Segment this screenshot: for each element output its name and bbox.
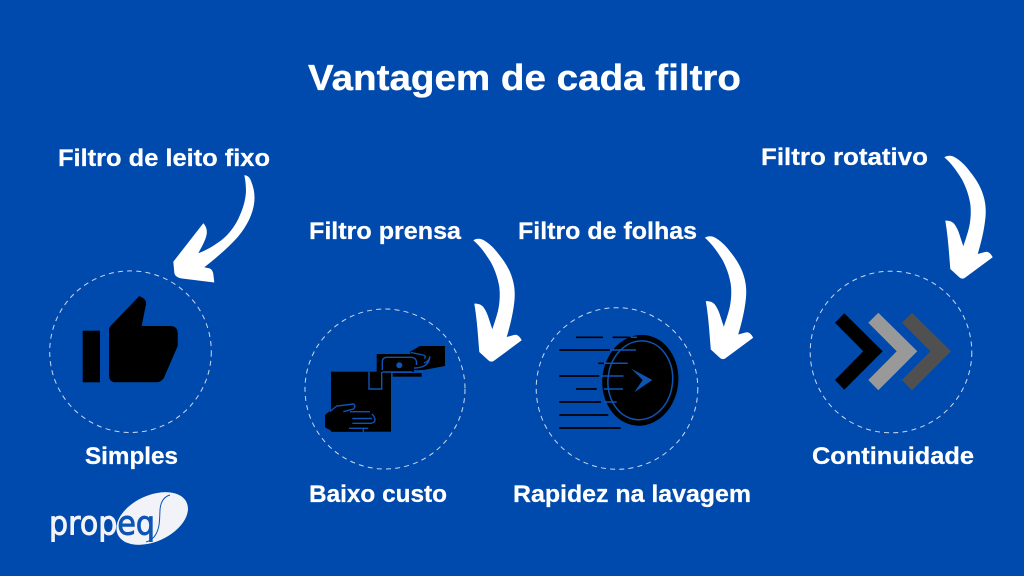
panel: filtro de folhas [513, 218, 753, 508]
chevron light gray [868, 313, 917, 390]
logo: propeq [49, 482, 196, 555]
logo blob [108, 482, 196, 555]
panel: filtro prensa [305, 218, 522, 508]
arrow: filtro de leito fixo [173, 175, 255, 282]
box [331, 372, 391, 432]
panel: filtro de leito fixo [50, 145, 270, 470]
icon: box and money exchange [325, 346, 445, 432]
lower hand [325, 404, 375, 432]
bill outline [382, 352, 430, 372]
dashed circle [810, 271, 972, 433]
heading: filtro de folhas: Filtro de folhas [518, 218, 697, 245]
title: Vantagem de cada filtro [308, 57, 741, 98]
motion lines blue [601, 337, 637, 402]
chevron dark gray [902, 313, 951, 390]
arrow: filtro prensa [473, 239, 522, 362]
money bill [377, 354, 419, 372]
arrow: filtro de folhas [705, 236, 753, 359]
chevron black [835, 313, 883, 390]
icon: fast coin [559, 331, 683, 430]
icon: triple chevrons [835, 313, 951, 390]
label: baixo custo: Baixo custo [309, 481, 447, 508]
coin arrow [631, 368, 652, 392]
upper hand [410, 346, 445, 372]
motion lines black [559, 337, 630, 428]
logo curve [146, 495, 170, 542]
heading: filtro prensa: Filtro prensa [309, 218, 462, 245]
coin [598, 331, 683, 430]
box tape [369, 372, 382, 389]
dashed circle [536, 308, 698, 469]
panel: filtro rotativo [761, 144, 993, 470]
coin ring [604, 338, 677, 423]
bill coin mark [396, 362, 402, 368]
label: continuidade: Continuidade [812, 443, 974, 470]
logo wordmark: propeq [49, 504, 155, 543]
heading: filtro rotativo: Filtro rotativo [761, 144, 928, 171]
dashed circle [305, 309, 465, 469]
label: rapidez na lavagem: Rapidez na lavagem [513, 481, 751, 508]
icon: thumbs up [83, 296, 178, 382]
label: simples: Simples [85, 443, 178, 470]
arrow: filtro rotativo [944, 156, 993, 279]
heading: filtro de leito fixo: Filtro de leito fixo [58, 145, 270, 172]
dashed circle [50, 271, 211, 433]
